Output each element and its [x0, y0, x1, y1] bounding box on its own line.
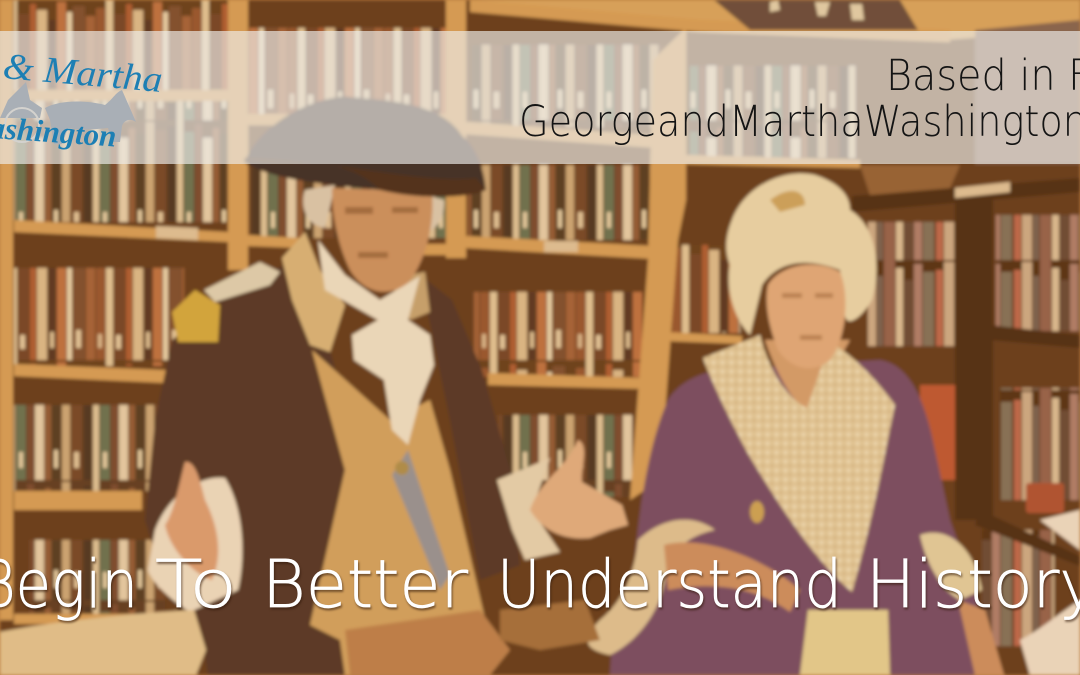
books: far centre under band	[690, 66, 855, 158]
books: right case	[868, 222, 972, 346]
lace sleeve left	[588, 520, 715, 655]
books: left bookcase row five	[30, 540, 165, 616]
white shoulder strap	[204, 262, 280, 302]
books: centre bookcase row two	[468, 165, 654, 240]
bonnet tie detail	[770, 191, 805, 212]
coat	[145, 262, 380, 675]
translucent header band	[0, 31, 1080, 164]
purple gown	[610, 360, 990, 675]
neck	[765, 340, 850, 412]
books: left bookcase top row	[14, 0, 228, 90]
blue sash	[392, 450, 450, 590]
lower coat flare	[345, 610, 510, 675]
open hand right	[530, 440, 628, 538]
cameo brooch	[750, 501, 764, 523]
horse and carriage silhouette	[0, 82, 136, 144]
left cuff	[148, 478, 242, 612]
books: far right case lower	[1000, 388, 1080, 500]
eyes and mouth shadows	[345, 207, 418, 258]
face	[767, 265, 845, 368]
carriage wheel	[5, 108, 39, 142]
facial features	[782, 293, 833, 340]
books: left bookcase row four	[14, 405, 159, 491]
logo text: & Martha: & Martha	[1, 46, 164, 101]
tricorn hat	[244, 96, 486, 197]
waistcoat lapel collar	[282, 232, 345, 352]
open hand left	[165, 462, 218, 580]
hat brim highlight	[244, 158, 486, 197]
face	[332, 188, 433, 292]
lace fichu	[703, 335, 895, 592]
red book	[920, 385, 956, 480]
books: far right case upper	[996, 215, 1080, 331]
books: middle bookcase row two	[248, 168, 446, 238]
right cuff	[497, 458, 560, 560]
Martha Washington figure	[588, 173, 1004, 675]
cravat	[318, 240, 434, 445]
white fabric bottom right	[1020, 510, 1080, 675]
books: centre bookcase row four	[498, 415, 632, 497]
lace sleeve right	[920, 533, 982, 600]
folded flag case	[714, 0, 1080, 195]
books: centre bookcase top row	[472, 45, 662, 127]
forearm across waist	[664, 542, 800, 612]
books: bottom right stack	[982, 530, 1054, 646]
books: section behind Martha	[670, 245, 740, 333]
gold epaulet	[172, 290, 220, 342]
headline: Understand	[497, 546, 842, 623]
shelf labels	[156, 182, 1010, 252]
gold waistcoat	[310, 350, 490, 675]
books: left bookcase row three	[14, 268, 184, 366]
arm at right	[958, 600, 1004, 675]
books: left bookcase row two	[14, 100, 228, 222]
logo	[0, 46, 164, 154]
dark right bookcase frame	[852, 178, 1080, 566]
bonnet	[726, 173, 876, 335]
headline: To	[155, 546, 237, 623]
white chair back	[0, 610, 206, 675]
headline	[0, 546, 1080, 623]
red mug	[1026, 483, 1064, 513]
books: middle bookcase top row	[248, 28, 446, 118]
George Washington figure	[145, 96, 628, 675]
wig	[303, 185, 444, 232]
medal	[395, 461, 409, 475]
papers on table	[500, 600, 600, 650]
headline: Better	[262, 546, 469, 623]
books: centre bookcase row three	[474, 292, 642, 377]
cream skirt panel	[800, 610, 890, 675]
